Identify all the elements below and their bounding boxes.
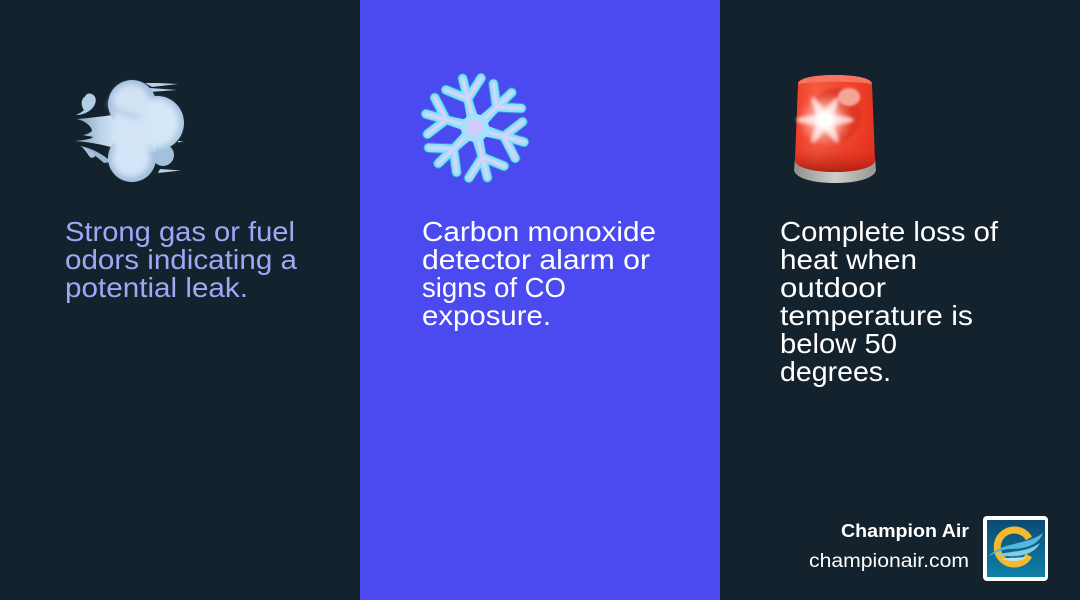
text: loss of heat: temperature is bbox=[780, 300, 973, 331]
text: carbon monoxide: detector alarm or bbox=[422, 244, 650, 275]
text: gas odors: odors indicating a bbox=[65, 244, 297, 275]
text: loss of heat: degrees. bbox=[780, 356, 891, 387]
text: loss of heat: outdoor bbox=[780, 272, 886, 303]
text: loss of heat: below 50 bbox=[780, 328, 897, 359]
text: loss of heat: heat when bbox=[780, 244, 917, 275]
icon: snowflake bbox=[411, 66, 539, 190]
brand name: Champion Air bbox=[841, 521, 969, 541]
center panel background bbox=[360, 0, 720, 600]
text: loss of heat: Complete loss of bbox=[780, 216, 998, 247]
text: carbon monoxide bbox=[422, 216, 656, 331]
text: gas odors: Strong gas or fuel bbox=[65, 216, 295, 247]
text: carbon monoxide: Carbon monoxide bbox=[422, 216, 656, 247]
text: gas odors bbox=[65, 216, 297, 303]
brand website: championair.com bbox=[809, 551, 969, 572]
logo bbox=[983, 516, 1048, 581]
text: loss of heat bbox=[780, 216, 998, 387]
text: carbon monoxide: exposure. bbox=[422, 300, 551, 331]
icon: gas puff bbox=[75, 80, 184, 182]
text: carbon monoxide: signs of CO bbox=[422, 272, 566, 303]
right panel background bbox=[720, 0, 1080, 600]
left panel background bbox=[0, 0, 360, 600]
text: gas odors: potential leak. bbox=[65, 272, 248, 303]
icon: red siren bbox=[794, 75, 876, 183]
